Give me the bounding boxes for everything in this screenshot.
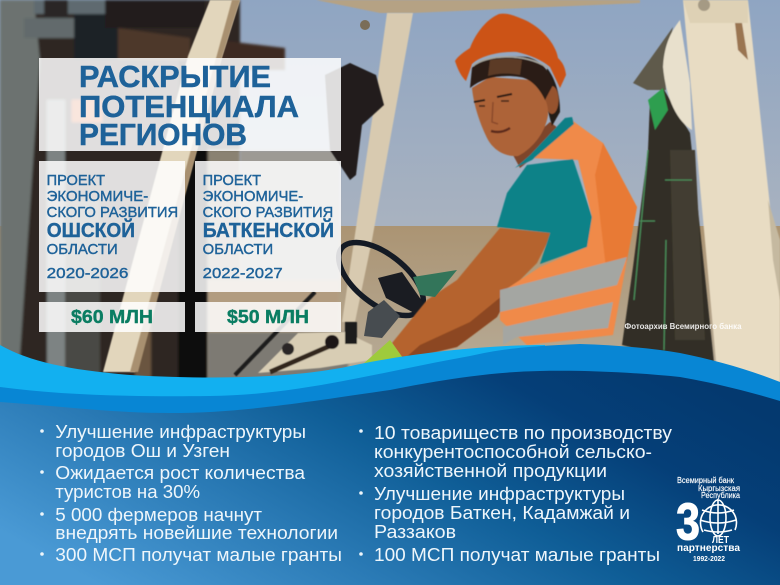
- Osh project text: 2020-2026: [47, 266, 128, 282]
- title text: ПОТЕНЦИАЛА: [79, 90, 299, 124]
- distant ground: [0, 226, 780, 386]
- face: [472, 77, 548, 156]
- left bullet list: Ожидается рост количества: [55, 462, 306, 483]
- title text: РЕГИОНОВ: [79, 118, 247, 152]
- background behind controls: [208, 150, 348, 387]
- Osh project text: ОБЛАСТИ: [47, 242, 118, 258]
- machinery at left: [0, 0, 285, 385]
- ear and back of head hair: [545, 68, 560, 126]
- Osh project text: СКОГО РАЗВИТИЯ: [47, 205, 178, 221]
- gloves: [362, 270, 457, 365]
- hair: [470, 56, 553, 100]
- title text: [79, 60, 299, 152]
- left roof bolt: [360, 20, 370, 30]
- Batken funding amount: $50 МЛН: [227, 306, 309, 327]
- Osh project text: ЭКОНОМИЧЕ-: [47, 189, 148, 205]
- logo: World Bank 30 years of partnership: 3: [676, 494, 700, 552]
- logo: World Bank 30 years of partnership: партнерства: [677, 543, 740, 554]
- logo: World Bank 30 years of partnership: ЛЕТ: [712, 535, 729, 546]
- Osh project text: ОШСКОЙ: [47, 218, 135, 242]
- vest reflective stripes: [500, 257, 627, 312]
- logo: World Bank 30 years of partnership: 1992-2022: [693, 556, 725, 563]
- logo: World Bank 30 years of partnership: Всемирный банк: [677, 476, 734, 485]
- left bullet list: внедрять новейшие технологии: [55, 522, 338, 543]
- right bullet list: Улучшение инфраструктуры: [374, 483, 625, 504]
- collar: [515, 117, 574, 168]
- Batken project text: ПРОЕКТ: [203, 173, 261, 189]
- left bullet list: туристов на 30%: [55, 481, 200, 502]
- Osh project text: [47, 173, 178, 282]
- Batken project text: [203, 173, 334, 282]
- right bullet list: 10 товариществ по производству: [374, 422, 673, 443]
- teal shirt: [497, 159, 592, 264]
- sky: [0, 0, 780, 240]
- photo credit: Фотоархив Всемирного банка: [624, 322, 742, 331]
- logo: World Bank 30 years of partnership: Республика: [701, 491, 740, 500]
- right mast: [683, 0, 780, 392]
- left bullet list: Улучшение инфраструктуры: [55, 421, 306, 442]
- cab front pillar: [342, 13, 413, 322]
- right bullet list: городов Баткен, Кадамжай и: [374, 502, 630, 523]
- wave: dark gradient background: [0, 371, 780, 585]
- photo: forklift driver in orange vest and hard hat: [0, 0, 780, 392]
- worker: [392, 14, 637, 360]
- coat hanging on the mast: [622, 20, 715, 372]
- right bullet list: конкурентоспособной сельско-: [374, 441, 652, 462]
- panel: Osh project: [39, 161, 185, 292]
- logo: World Bank 30 years of partnership: [676, 476, 740, 563]
- helmet band: [473, 57, 548, 68]
- Batken project text: БАТКЕНСКОЙ: [203, 218, 334, 242]
- right bullet list: хозяйственной продукции: [374, 460, 607, 481]
- title panel: [39, 58, 341, 152]
- Batken project text: ОБЛАСТИ: [203, 242, 273, 258]
- wave: medium blue band: [0, 344, 780, 585]
- globe icon: [700, 500, 736, 536]
- Osh project text: ПРОЕКТ: [47, 173, 105, 189]
- left bullet list: городов Ош и Узген: [55, 440, 230, 461]
- logo: World Bank 30 years of partnership: Кыргызская: [698, 484, 740, 493]
- vest: [500, 121, 637, 345]
- helmet: [455, 14, 566, 88]
- control levers: [235, 292, 372, 375]
- left bullet list: 5 000 фермеров начнут: [55, 504, 263, 525]
- left bullet list: 300 МСП получат малые гранты: [55, 544, 342, 565]
- wave: bright blue top band: [0, 345, 545, 420]
- cream diagonal mast: [103, 0, 240, 372]
- Osh funding amount: $60 МЛН: [71, 306, 153, 327]
- Batken funding amount: [195, 302, 341, 332]
- cable bundle: [325, 63, 384, 180]
- Osh funding amount: [39, 302, 185, 332]
- arm: [392, 228, 552, 360]
- title text: РАСКРЫТИЕ: [79, 60, 271, 94]
- cab roof beam: [316, 0, 640, 13]
- panel: Batken project: [195, 161, 341, 292]
- Batken project text: ЭКОНОМИЧЕ-: [203, 189, 303, 205]
- neck: [513, 122, 558, 168]
- right bullet list: 100 МСП получат малые гранты: [374, 544, 660, 565]
- left bullet list: [40, 421, 342, 565]
- steering wheel: [326, 229, 436, 338]
- right bullet list: [359, 422, 673, 565]
- right bullet list: Раззаков: [374, 521, 456, 542]
- Batken project text: 2022-2027: [203, 266, 283, 282]
- eyes and smile: [474, 94, 512, 102]
- Batken project text: СКОГО РАЗВИТИЯ: [203, 205, 333, 221]
